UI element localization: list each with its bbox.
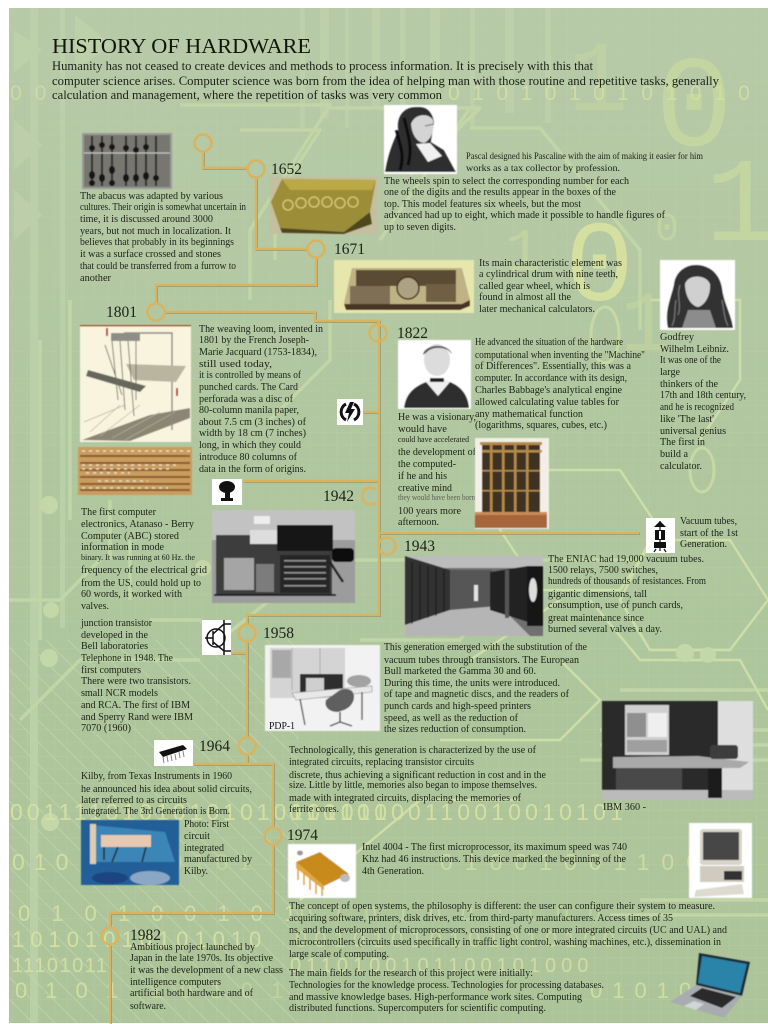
year labels: 1801 <box>106 304 137 321</box>
background: circuit board and binary digits: 10101 <box>150 978 301 1003</box>
junction transistor text: junction transistor <box>80 618 152 629</box>
visionary text: could have accelerated <box>398 434 470 444</box>
second generation text: of tape and magnetic discs, and the readers of <box>384 689 569 700</box>
junction transistor text: small NCR models <box>81 688 158 699</box>
Leibniz calculator text: called gear wheel, which is <box>479 281 590 292</box>
background: circuit board and binary digits: 010010011000 <box>440 849 736 875</box>
abacus text: The abacus was adapted by various <box>80 191 223 202</box>
second generation text: During this time, the units were introduced. <box>384 678 560 689</box>
loom text: it is controlled by means of <box>199 370 301 381</box>
visionary text: if he and his <box>398 471 447 482</box>
integrated circuits text: discrete, thus achieving a significant reduction in cost and in the <box>289 770 546 781</box>
Pascaline text <box>384 151 703 233</box>
year labels: 1652 <box>271 161 302 178</box>
Babbage text: He advanced the situation of the hardware <box>475 337 623 348</box>
visionary text: creative mind <box>398 483 453 494</box>
second generation text: the sizes reduction of consumption. <box>384 724 526 735</box>
background: circuit board and binary digits: 1 <box>505 221 541 289</box>
Pascaline text: top. This model features six wheels, but the most <box>384 199 581 210</box>
Pascaline text: advanced had up to eight, which made it possible to handle figures of <box>384 210 665 221</box>
background: circuit board and binary digits: 0101 <box>15 978 136 1003</box>
visionary text: He was a visionary, <box>398 412 476 423</box>
year labels: 1671 <box>334 241 365 258</box>
year labels: 1942 <box>323 488 354 505</box>
Leibniz calculator text: a cylindrical drum with nine teeth, <box>479 269 618 280</box>
ENIAC text: great maintenance since <box>548 613 644 624</box>
integrated circuits text: size. Little by little, memories also began to impose themselves. <box>289 780 537 791</box>
year labels: 1964 <box>199 738 230 755</box>
Babbage text: (logarithms, squares, cubes, etc.) <box>475 420 607 431</box>
Kilby text: Kilby, from Texas Instruments in 1960 <box>81 771 232 782</box>
ABC text: electronics, Atanaso - Berry <box>81 519 195 530</box>
second generation text: punch cards and high-speed printers <box>384 701 531 712</box>
integrated circuits text: made with integrated circuits, displacing the memories of <box>289 793 521 804</box>
image: ENIAC <box>405 556 543 636</box>
Leibniz text: Wilhelm Leibniz. <box>660 344 729 355</box>
image: abacus <box>82 133 172 189</box>
ABC text <box>81 507 208 612</box>
junction transistor text: and RCA. The first of IBM <box>81 700 191 711</box>
junction transistor text: There were two transistors. <box>81 676 191 687</box>
background: circuit board and binary digits: 00 <box>10 82 59 105</box>
background: circuit board and binary digits: 0 <box>655 208 679 253</box>
ENIAC text: 1500 relays, 7500 switches, <box>548 565 658 576</box>
junction transistor text: and Sperry Rand were IBM <box>81 712 194 723</box>
loom text: introduce 80 columns of <box>199 452 297 463</box>
ENIAC text: The ENIAC had 19,000 vacuum tubes. <box>548 554 704 565</box>
second generation text: This generation emerged with the substitution of the <box>384 642 587 653</box>
image: personal computer <box>689 823 752 898</box>
junction transistor text: developed in the <box>81 630 148 641</box>
intro text: computer science arises. Computer science was born from the idea of helping man with those routine and repetitive tasks, generally <box>52 74 720 88</box>
loom text: 1801 by the French Joseph- <box>199 335 309 346</box>
Leibniz text: build a <box>660 449 688 460</box>
title: HISTORY OF HARDWARE <box>52 34 311 58</box>
ENIAC text: hundreds of thousands of resistances. From <box>548 576 707 587</box>
image: IBM 360 <box>602 701 753 800</box>
ABC text: 60 words, it worked with <box>81 589 183 600</box>
visionary text: they would have been born <box>398 492 476 502</box>
Kilby text: he announced his idea about solid circuits, <box>81 784 252 795</box>
Babbage text: any mathematical function <box>475 409 584 420</box>
background: circuit board and binary digits: 0101010 <box>590 978 746 1003</box>
abacus text: another <box>80 273 111 284</box>
year labels: 1974 <box>287 827 318 844</box>
image: laptop <box>670 953 750 1018</box>
Kilby photo caption: integrated <box>184 843 225 854</box>
Leibniz text: and he is recognized <box>660 402 735 413</box>
1982 text: artificial both hardware and of <box>130 988 253 999</box>
loom text: width by 18 cm (7 inches) <box>199 428 306 439</box>
Leibniz calculator text: found in almost all the <box>479 292 571 303</box>
background: circuit board and binary digits: 1 <box>620 279 671 376</box>
image: Charles Babbage portrait <box>398 340 471 409</box>
icon: mushroom cloud <box>212 479 242 505</box>
integrated circuits text: ferrite cores. <box>289 804 339 815</box>
loom text: perforada was a disc of <box>199 394 293 405</box>
Intel 4004 text <box>362 842 627 877</box>
ENIAC text: gigantic dimensions, tall <box>548 589 647 600</box>
ABC text: information in mode <box>81 542 164 553</box>
visionary text <box>398 412 476 528</box>
Pascaline text: works as a tax collector by profession. <box>466 163 620 174</box>
intro text <box>52 59 720 102</box>
abacus text: that could be transferred from a furrow to <box>80 261 236 272</box>
1982 text: Japan in the late 1970s. Its objective <box>130 953 273 964</box>
image: PDP-1 <box>265 645 380 731</box>
vacuum tube text <box>680 516 738 550</box>
Babbage text: computational when inventing the "Machine" <box>475 350 645 361</box>
second generation text: vacuum tubes through transistors. The European <box>384 655 580 666</box>
Intel 4004 text: 4th Generation. <box>362 866 424 877</box>
concept text: large scale of computing. <box>289 949 389 960</box>
image: Pascaline <box>270 177 378 234</box>
Kilby photo caption <box>184 819 253 877</box>
abacus text <box>80 191 247 284</box>
1982 text: software. <box>130 1001 166 1012</box>
background: circuit board and binary digits: 0 <box>655 38 733 185</box>
abacus text: it was a surface crossed and stones <box>80 249 221 260</box>
Leibniz text <box>660 332 746 472</box>
visionary text: the computed- <box>398 459 456 470</box>
background: circuit board and binary digits: 0110100101100101000 <box>290 955 593 977</box>
year labels: 1958 <box>263 625 294 642</box>
vacuum tube text: Vacuum tubes, <box>680 516 737 527</box>
1982 text: Ambitious project launched by <box>130 942 256 953</box>
ABC text: frequency of the electrical grid <box>81 565 208 576</box>
loom text: data in the form of origins. <box>199 464 306 475</box>
image: Kilby integrated circuit <box>81 820 179 885</box>
vacuum tube text: start of the 1st <box>680 528 738 539</box>
background: circuit board and binary digits: 00111101010101010101010 <box>10 799 391 825</box>
Leibniz text: calculator. <box>660 461 702 472</box>
ENIAC text <box>548 554 707 635</box>
background: circuit board and binary digits: 01010100110010010101 <box>289 799 627 825</box>
ABC text: binary. It was running at 60 Hz. the <box>81 552 195 562</box>
ABC text: valves. <box>81 601 109 612</box>
Kilby photo caption: Photo: First <box>184 819 229 830</box>
image: Blaise Pascal portrait <box>384 105 457 174</box>
second generation text: Bull marketed the Gamma 30 and 60. <box>384 666 536 677</box>
research fields text: distributed functions. Supercomputers for scientific computing. <box>289 1003 546 1014</box>
abacus text: years, but not much in localization. It <box>80 226 231 237</box>
background: circuit board and binary digits: 0101001100 <box>300 901 621 926</box>
Babbage text: Charles Babbage's analytical engine <box>475 385 622 396</box>
vacuum tube text: Generation. <box>680 539 727 550</box>
icon: lightning <box>337 399 363 425</box>
icon: transistor <box>202 620 231 655</box>
Leibniz calculator text: later mechanical calculators. <box>479 304 595 315</box>
Leibniz text: 17th and 18th century, <box>660 390 746 401</box>
ABC text: Computer (ABC) stored <box>81 531 180 542</box>
concept text: microcontrollers (circuits used specifically in traffic light control, washing machines, etc.), dissemination in <box>289 937 722 948</box>
background: circuit board and binary digits: 0101010101010 <box>448 82 762 105</box>
Pascaline text: one of the digits and the results appear in the boxes of the <box>384 187 616 198</box>
concept text: The concept of open systems, the philosophy is different: the user can configure their system to measure. <box>289 901 715 912</box>
Kilby text: integrated. The 3rd Generation is Born. <box>81 806 230 817</box>
research fields text: The main fields for the research of this project were initially: <box>289 968 533 979</box>
1982 text: it was the development of a new class <box>130 965 283 976</box>
image: Babbage difference engine <box>475 438 549 529</box>
loom text: The weaving loom, invented in <box>199 324 324 335</box>
loom text: about 7.5 cm (3 inches) of <box>199 417 306 428</box>
ENIAC text: consumption, use of punch cards, <box>548 600 683 611</box>
background: circuit board and binary digits: 11101011 <box>12 955 109 977</box>
Kilby text: later referred to as circuits <box>81 795 187 806</box>
visionary text: the development of <box>398 447 476 458</box>
integrated circuits text: integrated circuits, replacing transistor circuits <box>289 757 474 768</box>
background: circuit board and binary digits: 010100101 <box>18 901 317 926</box>
Leibniz text: large <box>660 367 680 378</box>
Pascaline text: The wheels spin to select the corresponding number for each <box>384 176 630 187</box>
PDP-1 label: PDP-1 <box>269 721 295 732</box>
Leibniz text: Godfrey <box>660 332 695 343</box>
image: Intel 4004 <box>288 844 356 898</box>
Babbage text: allowed calculating value tables for <box>475 397 619 408</box>
concept text <box>289 901 728 960</box>
icon: vacuum tube <box>646 518 675 553</box>
abacus text: believes that probably in its beginnings <box>80 237 234 248</box>
year labels: 1943 <box>404 538 435 555</box>
concept text: acquiring software, printers, disk drives, etc. from third-party manufacturers. Access times of 35 <box>289 913 673 924</box>
Pascaline text: up to seven digits. <box>384 222 456 233</box>
visionary text: afternoon. <box>398 517 439 528</box>
image: Atanasoff-Berry Computer <box>212 510 355 603</box>
background: circuit board and binary digits: 10101010101010 <box>12 927 267 952</box>
intro text: Humanity has not ceased to create devices and methods to process information. It is precisely with this that <box>52 59 594 73</box>
Intel 4004 text: Intel 4004 - The first microprocessor, its maximum speed was 740 <box>362 842 627 853</box>
intro text: calculation and management, where the repetition of tasks was very common <box>52 88 442 102</box>
research fields text <box>289 968 604 1014</box>
Kilby text <box>81 771 252 817</box>
second generation text: speed, as well as the reduction of <box>384 713 518 724</box>
year labels: 1822 <box>397 325 428 342</box>
loom text: long, in which they could <box>199 440 302 451</box>
junction transistor text: Bell laboratories <box>81 641 148 652</box>
Leibniz calculator text <box>479 258 622 315</box>
image: Leibniz calculator <box>334 260 474 313</box>
Leibniz text: universal genius <box>660 426 726 437</box>
year labels <box>106 161 435 944</box>
background: circuit board and binary digits: 0101 <box>170 849 261 875</box>
second generation text <box>384 642 587 735</box>
Leibniz text: It was one of the <box>660 355 721 366</box>
research fields text: and massive knowledge bases. High-performance work sites. Computing <box>289 992 583 1003</box>
background: circuit board and binary digits: 010 <box>12 849 77 875</box>
abacus text: time, it is discussed around 3000 <box>80 214 213 225</box>
visionary text: would have <box>398 424 447 435</box>
Kilby photo caption: Kilby. <box>184 866 208 877</box>
1982 text: intelligence computers <box>130 977 221 988</box>
Babbage text <box>475 337 645 431</box>
Intel 4004 text: Khz had 46 instructions. This device marked the beginning of the <box>362 854 626 865</box>
Pascaline text: Pascal designed his Pascaline with the aim of making it easier for him <box>466 151 703 162</box>
Kilby photo caption: manufactured by <box>184 854 253 865</box>
IBM 360 label: IBM 360 - <box>603 802 646 813</box>
concept text: ns, and the development of microprocessors, consisting of one or more integrated circuits (UC and UAL) and <box>289 925 728 936</box>
visionary text: 100 years more <box>398 506 461 517</box>
junction transistor text: 7070 (1960) <box>81 723 131 734</box>
integrated circuits text <box>289 745 546 815</box>
Leibniz text: The first in <box>660 437 706 448</box>
image: Leibniz portrait <box>660 260 735 330</box>
research fields text: Technologies for the knowledge process. Technologies for processing databases. <box>289 980 604 991</box>
integrated circuits text: Technologically, this generation is characterized by the use of <box>289 745 536 756</box>
year labels: 1982 <box>130 927 161 944</box>
image: Jacquard loom <box>80 325 191 442</box>
ABC text: The first computer <box>81 507 156 518</box>
loom text: 80-column manila paper, <box>199 405 299 416</box>
icon: integrated circuit chip <box>154 740 193 766</box>
background: circuit board and binary digits: 00101010101010100 <box>295 927 622 952</box>
timeline connector <box>102 134 640 1024</box>
loom text <box>199 324 324 475</box>
image: punched card <box>78 447 192 495</box>
Leibniz text: thinkers of the <box>660 379 718 390</box>
background: circuit board and binary digits: 1 <box>568 28 628 141</box>
loom text: punched cards. The Card <box>199 382 299 393</box>
junction transistor text <box>80 618 194 734</box>
ABC text: from the US, could hold up to <box>81 578 201 589</box>
loom text: still used today, <box>199 359 272 370</box>
abacus text: cultures. Their origin is somewhat uncertain in <box>80 202 247 213</box>
Babbage text: of Differences". Essentially, this was a <box>475 361 631 372</box>
background: circuit board and binary digits: 0 <box>565 204 634 335</box>
junction transistor text: Telephone in 1948. The <box>81 653 173 664</box>
Leibniz text: like 'The last' <box>660 414 714 425</box>
Kilby photo caption: circuit <box>184 831 210 842</box>
ENIAC text: burned several valves a day. <box>548 624 662 635</box>
Babbage text: computer. In accordance with its design, <box>475 373 627 384</box>
1982 text <box>130 942 283 1012</box>
Leibniz calculator text: Its main characteristic element was <box>479 258 622 269</box>
junction transistor text: first computers <box>81 665 141 676</box>
loom text: Marie Jacquard (1753-1834), <box>199 347 317 358</box>
